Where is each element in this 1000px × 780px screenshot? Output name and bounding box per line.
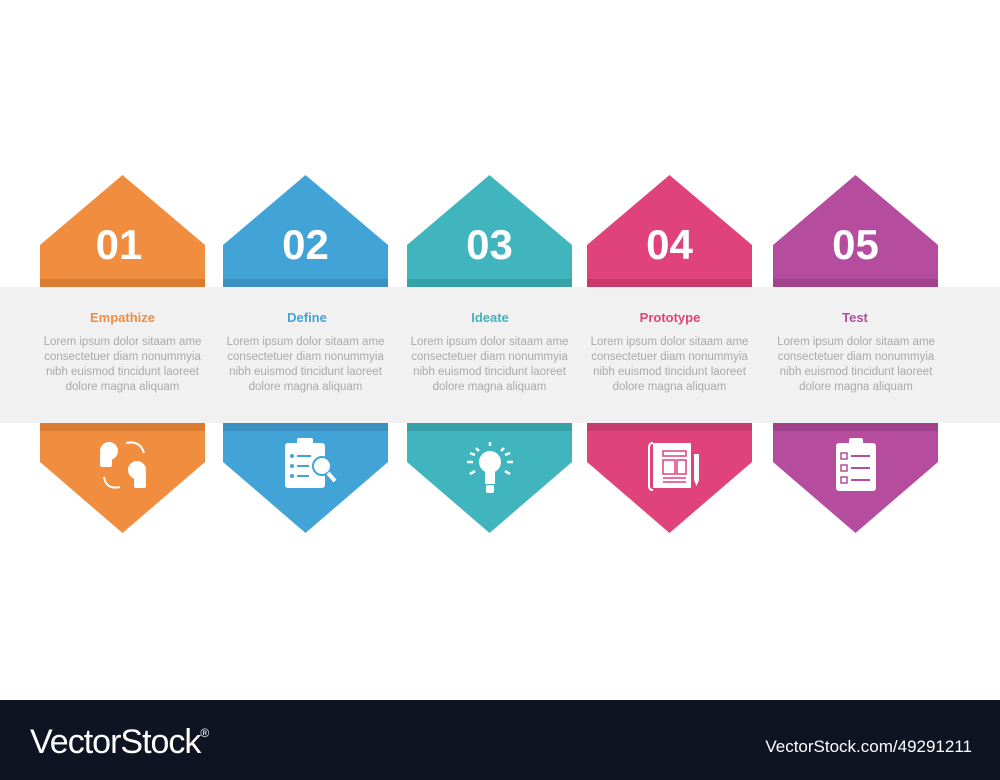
bottom pentagon with icon: clipboard magnifier [223, 423, 388, 533]
step 5: Test [773, 175, 938, 533]
top pentagon 03: 03 [466, 221, 513, 268]
top pentagon 02: 02 [282, 221, 329, 268]
title: Ideate: Ideate [471, 310, 509, 325]
body text 5: consectetuer diam nonummyia [778, 351, 935, 363]
body text 2: nibh euismod tincidunt laoreet [229, 366, 383, 378]
body text 1: dolore magna aliquam [66, 381, 179, 393]
top pentagon 01 [40, 175, 205, 287]
body text 5: Lorem ipsum dolor sitaam ame [777, 336, 935, 348]
body text 4: dolore magna aliquam [613, 381, 726, 393]
body text 5: dolore magna aliquam [799, 381, 913, 393]
top pentagon 04 [587, 175, 752, 287]
title: Test: Test [842, 310, 869, 325]
step 1: Empathize [40, 175, 205, 533]
step 2: Define [223, 175, 388, 533]
step 4: Prototype [587, 175, 752, 533]
body text 1: nibh euismod tincidunt laoreet [46, 366, 200, 378]
body text 1: consectetuer diam nonummyia [44, 351, 201, 363]
top pentagon 02 [223, 175, 388, 287]
gray band [0, 287, 1000, 423]
body text 3: consectetuer diam nonummyia [411, 351, 568, 363]
body text 3: dolore magna aliquam [433, 381, 546, 393]
body text 5: nibh euismod tincidunt laoreet [780, 366, 933, 378]
step 3: Ideate [407, 175, 572, 533]
body text 4: nibh euismod tincidunt laoreet [593, 366, 747, 378]
bottom pentagon with icon: people [40, 423, 205, 533]
footer logo: VectorStock [30, 723, 200, 761]
body text 4: Lorem ipsum dolor sitaam ame [591, 336, 748, 348]
body text 2: consectetuer diam nonummyia [227, 351, 384, 363]
footer logo: ® [200, 726, 209, 740]
body text 3: Lorem ipsum dolor sitaam ame [411, 336, 568, 348]
top pentagon 03 [407, 175, 572, 287]
title: Prototype: Prototype [640, 310, 700, 325]
title: Define: Define [287, 310, 327, 325]
body text 2: dolore magna aliquam [249, 381, 362, 393]
body text 1: Lorem ipsum dolor sitaam ame [44, 336, 201, 348]
bottom pentagon with icon: checklist clipboard [773, 423, 938, 533]
footer id: VectorStock.com/49291211 [765, 737, 972, 756]
bottom pentagon with icon: blueprint [587, 423, 752, 533]
body text 2: Lorem ipsum dolor sitaam ame [227, 336, 384, 348]
top pentagon 01: 01 [96, 221, 142, 268]
body text 3: nibh euismod tincidunt laoreet [413, 366, 567, 378]
top pentagon 05: 05 [832, 221, 879, 268]
bottom pentagon with icon: light bulb [407, 423, 572, 533]
body text 4: consectetuer diam nonummyia [591, 351, 748, 363]
top pentagon 05 [773, 175, 938, 287]
top pentagon 04: 04 [646, 221, 693, 268]
footer bar [0, 700, 1000, 780]
title: Empathize: Empathize [90, 310, 155, 325]
